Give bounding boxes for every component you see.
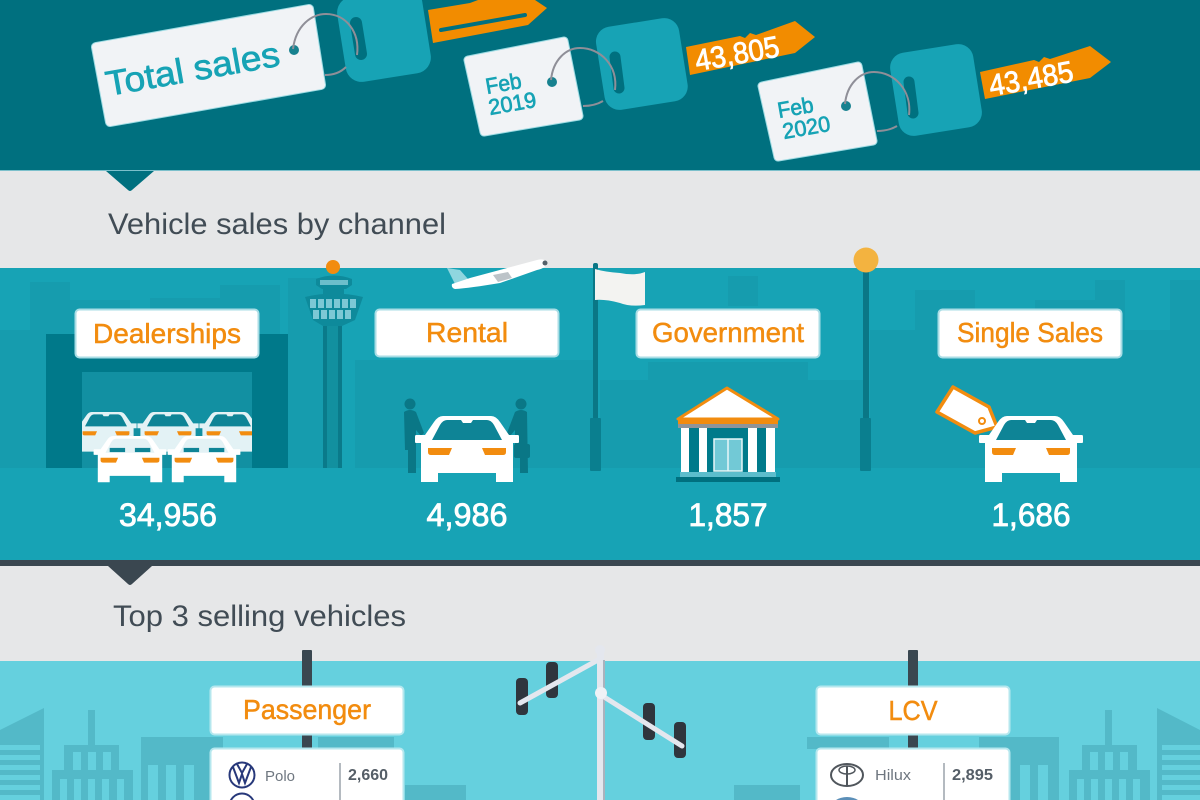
channel: single sales	[937, 310, 1122, 533]
skyline: right	[734, 708, 1200, 800]
key: Feb 2020	[762, 42, 1111, 157]
icon: person left	[404, 398, 424, 473]
value: single sales: 1,686	[992, 497, 1070, 533]
label: LCV	[816, 686, 1010, 734]
key: Feb 2020: 43,485	[986, 56, 1076, 103]
key: Feb 2019: 43,805	[692, 31, 782, 78]
panel: channel heading band	[0, 171, 1200, 268]
label: dealerships	[76, 310, 258, 358]
table: passenger: Polo	[265, 768, 295, 785]
dealership arch	[46, 334, 288, 468]
value: rental: 4,986	[426, 497, 508, 533]
icon: flag pole	[590, 263, 645, 471]
sign: passenger	[210, 650, 404, 800]
key: total sales	[96, 0, 547, 122]
icon: person right	[507, 398, 530, 473]
label: single sales: Single Sales	[957, 317, 1103, 348]
icon: rental car	[415, 416, 519, 482]
logo: Volkswagen	[230, 762, 254, 788]
label: passenger: Passenger	[243, 694, 371, 725]
label: passenger	[210, 686, 404, 734]
key: Feb 2019: Feb	[484, 68, 523, 99]
panel: total sales band	[0, 0, 1200, 172]
icon: street lamp	[854, 248, 878, 471]
value: government: 1,857	[688, 497, 768, 533]
arrow: pointer from total sales	[106, 171, 154, 191]
label: government: Government	[652, 317, 804, 348]
arrow: pointer from channel panel	[108, 566, 152, 585]
label: dealerships: Dealerships	[93, 318, 241, 349]
panel: top sellers heading band	[0, 566, 1200, 661]
table: passenger	[210, 748, 404, 800]
table: LCV	[816, 748, 1010, 800]
table: LCV: Hilux	[875, 767, 912, 784]
channel: government	[590, 263, 820, 533]
label: LCV: LCV	[888, 695, 938, 726]
logo: row 2 oval	[831, 797, 863, 800]
icon: aeroplane	[447, 259, 548, 289]
icon: single car	[979, 416, 1083, 482]
value: dealerships: 34,956	[119, 497, 217, 533]
label: rental: Rental	[426, 317, 508, 348]
label: government	[636, 310, 820, 358]
table: passenger: 2,660	[348, 767, 388, 784]
key: Feb 2019: 2019	[487, 87, 538, 120]
panel: top 3 selling vehicles	[0, 645, 1200, 800]
channel: dealerships	[46, 310, 288, 533]
key: total sales: Total sales	[103, 35, 283, 104]
skyline: left	[0, 708, 466, 800]
dealership cars	[75, 412, 261, 452]
channel: rental	[376, 310, 558, 533]
heading: top 3 selling vehicles: Top 3 selling vehicles	[113, 600, 406, 633]
icon: control tower	[305, 260, 363, 468]
icon: government building	[676, 388, 780, 482]
label: single sales	[938, 310, 1122, 358]
table: LCV: 2,895	[952, 767, 993, 784]
logo: Volkswagen row 2	[230, 794, 254, 800]
icon: traffic lights	[516, 645, 686, 800]
key: Feb 2019	[468, 16, 815, 132]
icon: price tag	[937, 387, 997, 433]
logo: Toyota	[831, 764, 863, 786]
heading: vehicle sales by channel: Vehicle sales by channel	[108, 208, 446, 241]
sign: LCV	[816, 650, 1010, 800]
panel: vehicle sales by channel	[0, 248, 1200, 560]
key: Feb 2020: 2020	[781, 111, 832, 144]
label: rental	[376, 310, 558, 356]
key: Feb 2020: Feb	[776, 92, 815, 123]
